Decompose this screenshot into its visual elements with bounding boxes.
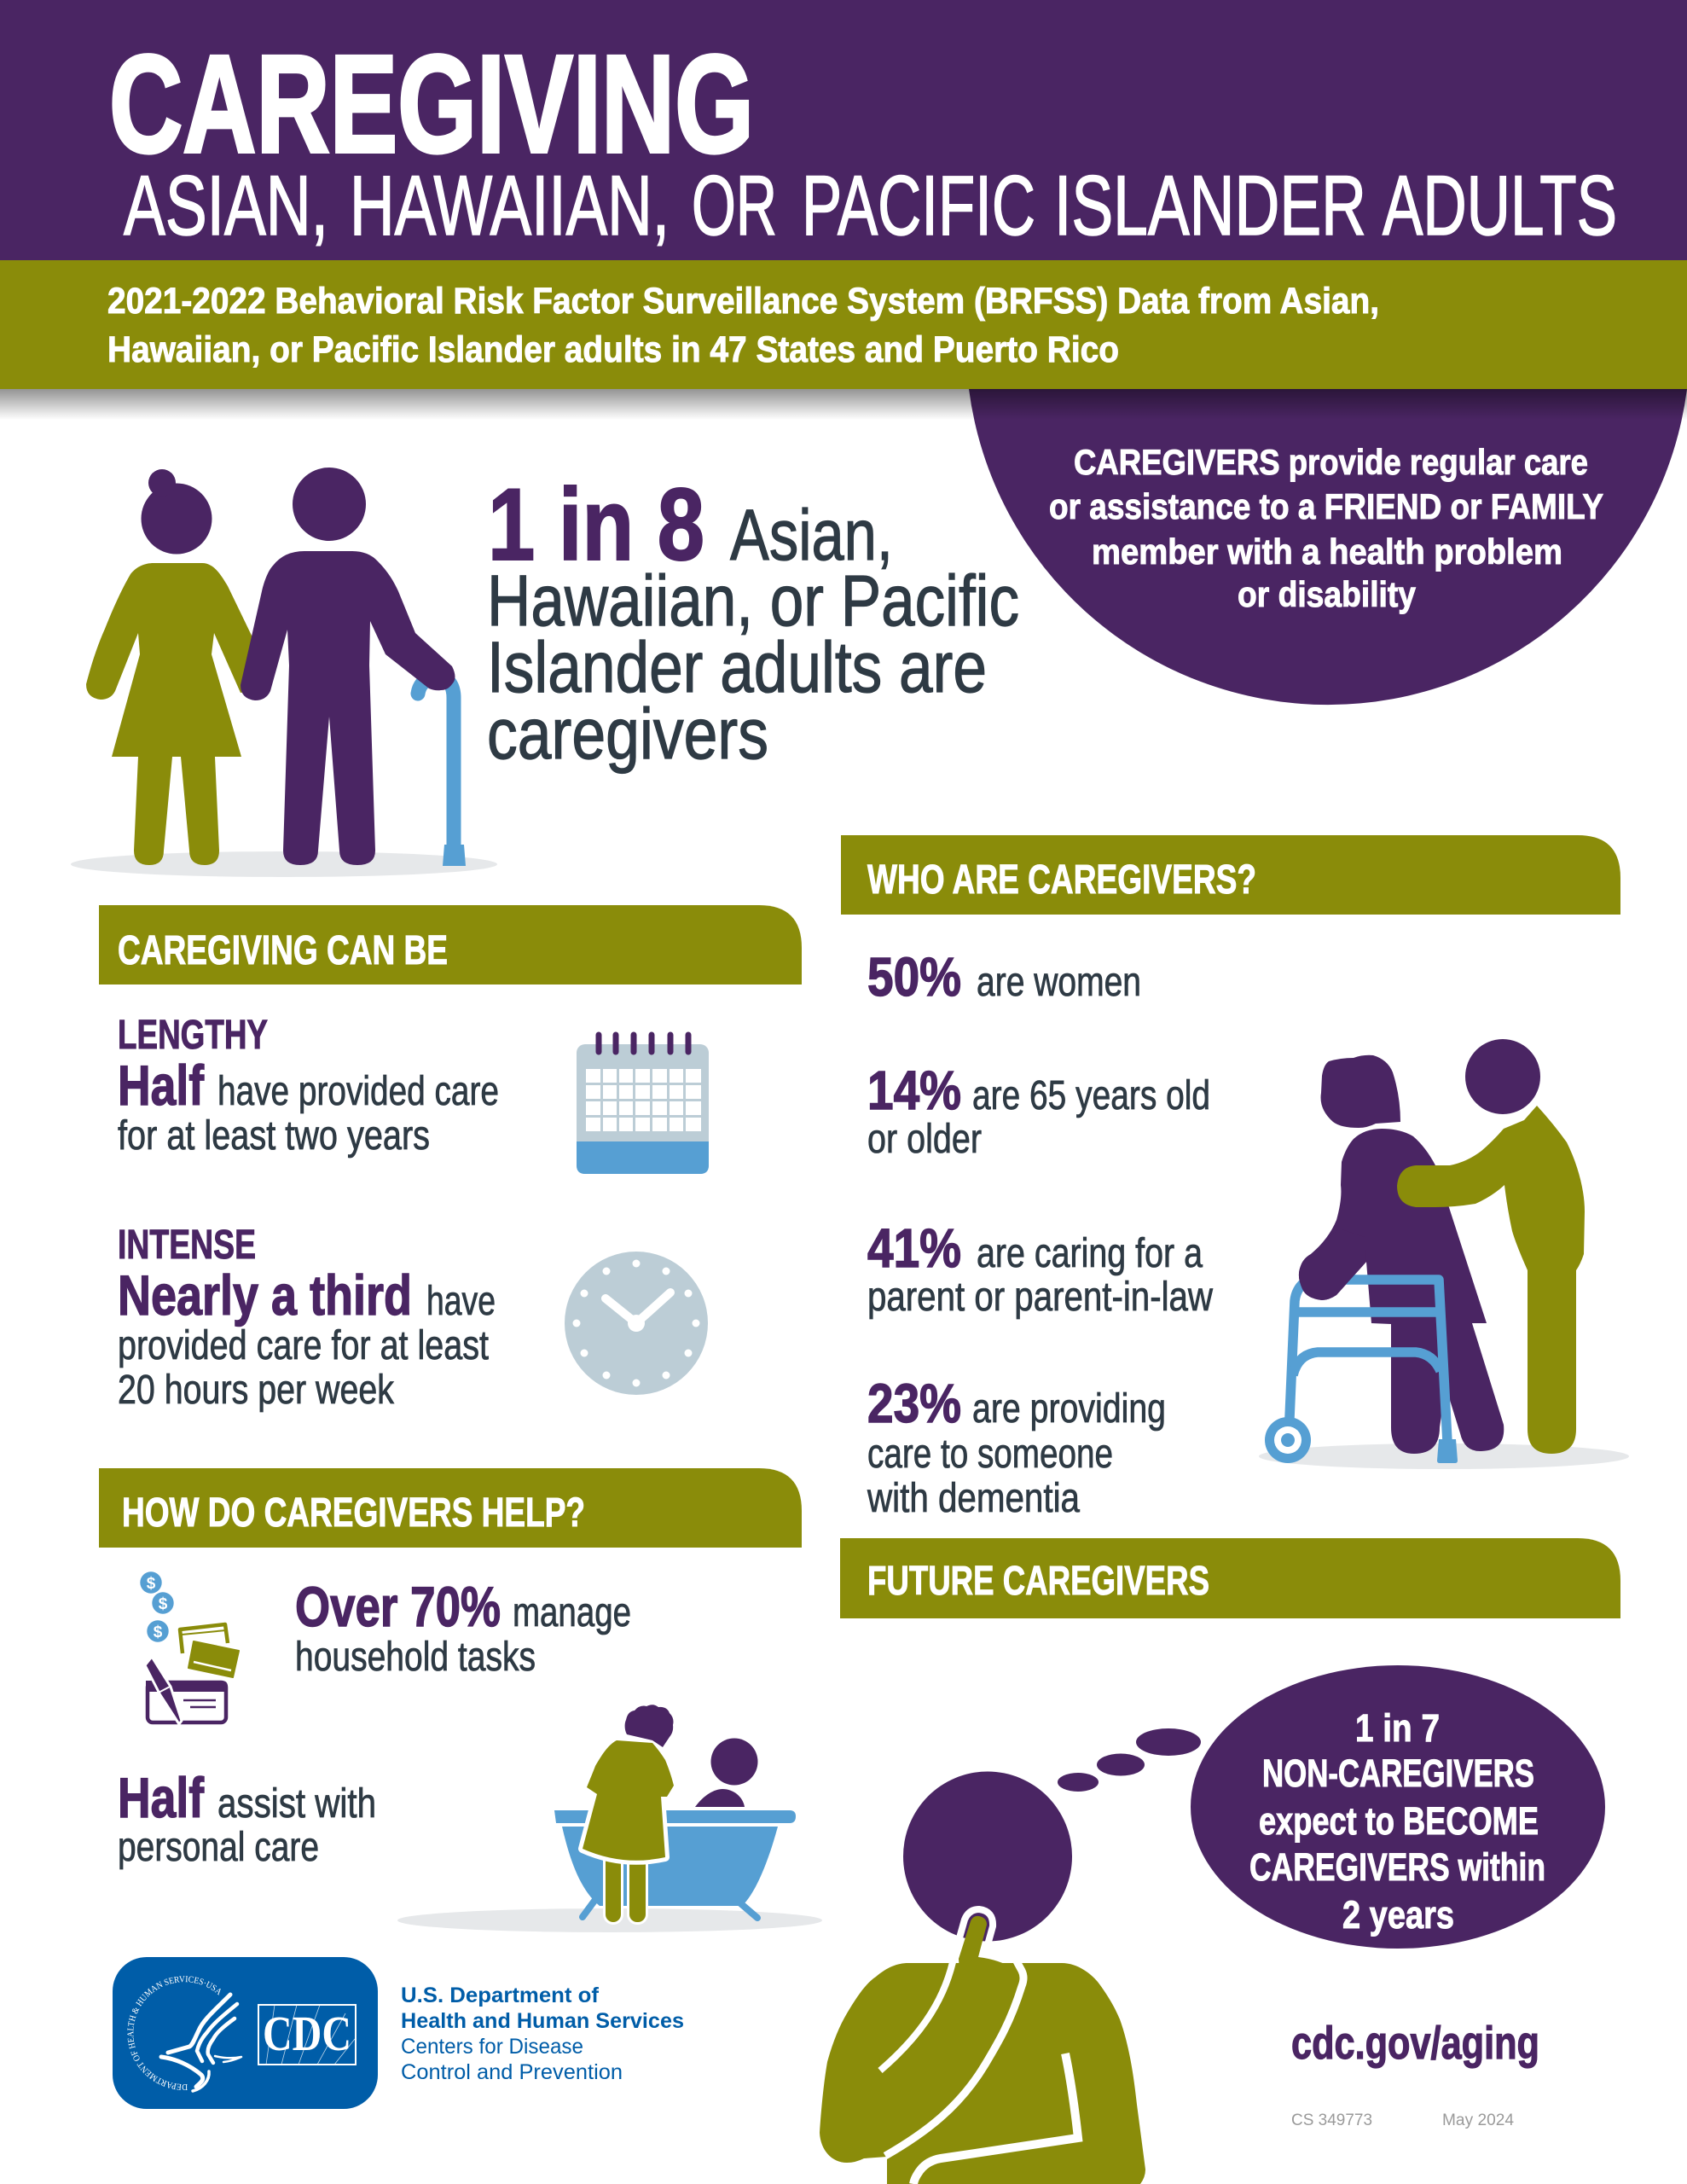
stat: parent bbox=[867, 1217, 1213, 1320]
stat: age 65 or older: are 65 years old bbox=[972, 1073, 1210, 1118]
subtitle: ISLANDER bbox=[1054, 158, 1366, 253]
woman head bbox=[142, 469, 212, 555]
stat: parent: parent or parent-in-law bbox=[867, 1275, 1213, 1320]
heading bbox=[99, 1468, 802, 1548]
agency name: Control and Prevention bbox=[401, 2060, 623, 2084]
seal text: DEPARTMENT OF HEALTH & HUMAN SERVICES·USA bbox=[127, 1976, 221, 2090]
stat: dementia bbox=[867, 1373, 1166, 1521]
text: personal care: personal care bbox=[118, 1825, 319, 1870]
panel: future caregivers bbox=[820, 1538, 1620, 2184]
thought bubble bbox=[1058, 1665, 1605, 1949]
stat: age 65 or older: 14% bbox=[867, 1060, 961, 1121]
definition circle: caregivers: or assistance to a FRIEND or FAMILY bbox=[1049, 486, 1603, 526]
statistic: 1 in 8: Islander adults are bbox=[487, 627, 987, 707]
statistic: 1 in 8 bbox=[487, 468, 1019, 774]
statistic: 1 in 8: caregivers bbox=[487, 694, 768, 774]
stat: parent: 41% bbox=[867, 1217, 961, 1279]
icon: bills and checkbook bbox=[140, 1571, 239, 1724]
heading: HOW DO CAREGIVERS HELP? bbox=[122, 1490, 585, 1536]
icon: clock bbox=[565, 1252, 708, 1395]
man figure bbox=[241, 551, 455, 865]
title: CAREGIVING bbox=[109, 26, 754, 182]
heading bbox=[840, 1538, 1620, 1618]
definition circle: caregivers: or disability bbox=[1238, 574, 1417, 614]
stat: parent: are caring for a bbox=[977, 1231, 1203, 1276]
panel: how do caregivers help bbox=[99, 1468, 822, 1932]
panel: who are caregivers bbox=[841, 835, 1629, 1521]
text: household tasks: manage bbox=[513, 1590, 631, 1635]
icon: older couple with cane bbox=[71, 468, 497, 877]
heading bbox=[99, 905, 802, 985]
statistic: 1 in 8: 1 in 8 bbox=[488, 468, 704, 582]
publication code and date: May 2024 bbox=[1442, 2111, 1514, 2129]
stat: dementia: 23% bbox=[867, 1373, 961, 1434]
text: personal care bbox=[118, 1766, 376, 1870]
text: personal care: assist with bbox=[217, 1781, 376, 1827]
subtitle: PACIFIC bbox=[802, 158, 1035, 253]
heading: FUTURE CAREGIVERS bbox=[867, 1559, 1209, 1604]
icon: calendar bbox=[577, 1035, 709, 1174]
stat: age 65 or older: or older bbox=[867, 1117, 982, 1162]
agency name: Centers for Disease bbox=[401, 2035, 583, 2059]
icon: bills and checkbook: $ bbox=[159, 1595, 168, 1613]
subtitle bbox=[124, 158, 1617, 253]
definition circle: caregivers bbox=[969, 389, 1687, 705]
text: intense: 20 hours per week bbox=[118, 1368, 395, 1413]
agency name: U.S. Department of bbox=[401, 1984, 600, 2007]
icon: bills and checkbook: $ bbox=[154, 1623, 163, 1641]
subtitle: OR bbox=[692, 158, 777, 253]
statistic: 1 in 8: Hawaiian, or Pacific bbox=[487, 561, 1019, 641]
finger outline bbox=[880, 1909, 993, 2071]
stat: women bbox=[867, 946, 1141, 1008]
thought bubble: NON-CAREGIVERS bbox=[1262, 1751, 1534, 1795]
text: lengthy: for at least two years bbox=[118, 1113, 430, 1159]
text: intense bbox=[118, 1223, 496, 1413]
stat: women: are women bbox=[977, 960, 1141, 1005]
stat: dementia: care to someone bbox=[867, 1432, 1113, 1477]
agency name bbox=[401, 1984, 684, 2084]
finger and hand bbox=[959, 1916, 1017, 1978]
woman figure bbox=[86, 563, 256, 865]
heading bbox=[841, 835, 1620, 915]
text: household tasks: household tasks bbox=[295, 1635, 536, 1680]
patient arm bbox=[1299, 1228, 1366, 1300]
text: intense: have bbox=[426, 1279, 496, 1324]
stat: age 65 or older bbox=[867, 1060, 1210, 1162]
text: personal care: Half bbox=[118, 1766, 205, 1829]
header band: title bbox=[0, 0, 1687, 260]
definition circle: caregivers: member with a health problem bbox=[1092, 531, 1562, 572]
text: lengthy: Half bbox=[118, 1054, 205, 1117]
caregiver bbox=[1397, 1106, 1585, 1454]
stat: dementia: are providing bbox=[972, 1386, 1166, 1432]
link: cdc.gov/aging: cdc.gov/aging bbox=[1291, 2018, 1539, 2069]
statistic: 1 in 8: Asian, bbox=[730, 495, 893, 575]
icon: caregiver helping person with walker bbox=[1259, 1039, 1629, 1469]
text: lengthy bbox=[118, 1013, 499, 1159]
icon: bills and checkbook: $ bbox=[147, 1575, 156, 1593]
subtitle: HAWAIIAN, bbox=[350, 158, 670, 253]
icon: thinking person bbox=[820, 1771, 1145, 2184]
agency name: Health and Human Services bbox=[401, 2009, 684, 2033]
data source band bbox=[0, 260, 1687, 389]
logo: HHS and CDC bbox=[113, 1957, 684, 2109]
walker bbox=[1290, 1280, 1447, 1442]
thought bubble: 1 in 7 bbox=[1355, 1706, 1440, 1750]
publication code and date: CS 349773 bbox=[1291, 2111, 1372, 2129]
icon: HHS eagle bbox=[161, 1995, 241, 2091]
CDC mark: CDC bbox=[263, 2006, 351, 2061]
stat: dementia: with dementia bbox=[867, 1476, 1080, 1521]
data source band: Hawaiian, or Pacific Islander adults in 47 States and Puerto Rico bbox=[107, 329, 1119, 370]
thought bubble: expect to BECOME bbox=[1259, 1799, 1539, 1843]
text: household tasks bbox=[295, 1575, 631, 1680]
heading: CAREGIVING CAN BE bbox=[118, 928, 448, 973]
definition circle: caregivers: CAREGIVERS provide regular care bbox=[1074, 442, 1588, 482]
text: intense: INTENSE bbox=[118, 1223, 256, 1268]
text: intense: provided care for at least bbox=[118, 1323, 489, 1368]
heading: WHO ARE CAREGIVERS? bbox=[867, 857, 1256, 903]
data source band: 2021-2022 Behavioral Risk Factor Surveillance System (BRFSS) Data from Asian, bbox=[107, 281, 1379, 322]
icon: bathing assistance bbox=[397, 1705, 822, 1932]
thought bubble: CAREGIVERS within bbox=[1249, 1845, 1545, 1889]
stat: women: 50% bbox=[867, 946, 961, 1008]
patient bbox=[1321, 1055, 1400, 1128]
text: intense: Nearly a third bbox=[118, 1263, 412, 1327]
text: household tasks: Over 70% bbox=[295, 1575, 501, 1638]
publication code and date bbox=[1291, 2111, 1514, 2129]
text: lengthy: have provided care bbox=[217, 1069, 499, 1114]
icon: cane bbox=[418, 677, 466, 866]
thought bubble: 2 years bbox=[1342, 1893, 1454, 1937]
panel: caregiving can be bbox=[99, 905, 802, 1413]
subtitle: ASIAN, bbox=[124, 158, 328, 253]
text: lengthy: LENGTHY bbox=[118, 1013, 268, 1058]
